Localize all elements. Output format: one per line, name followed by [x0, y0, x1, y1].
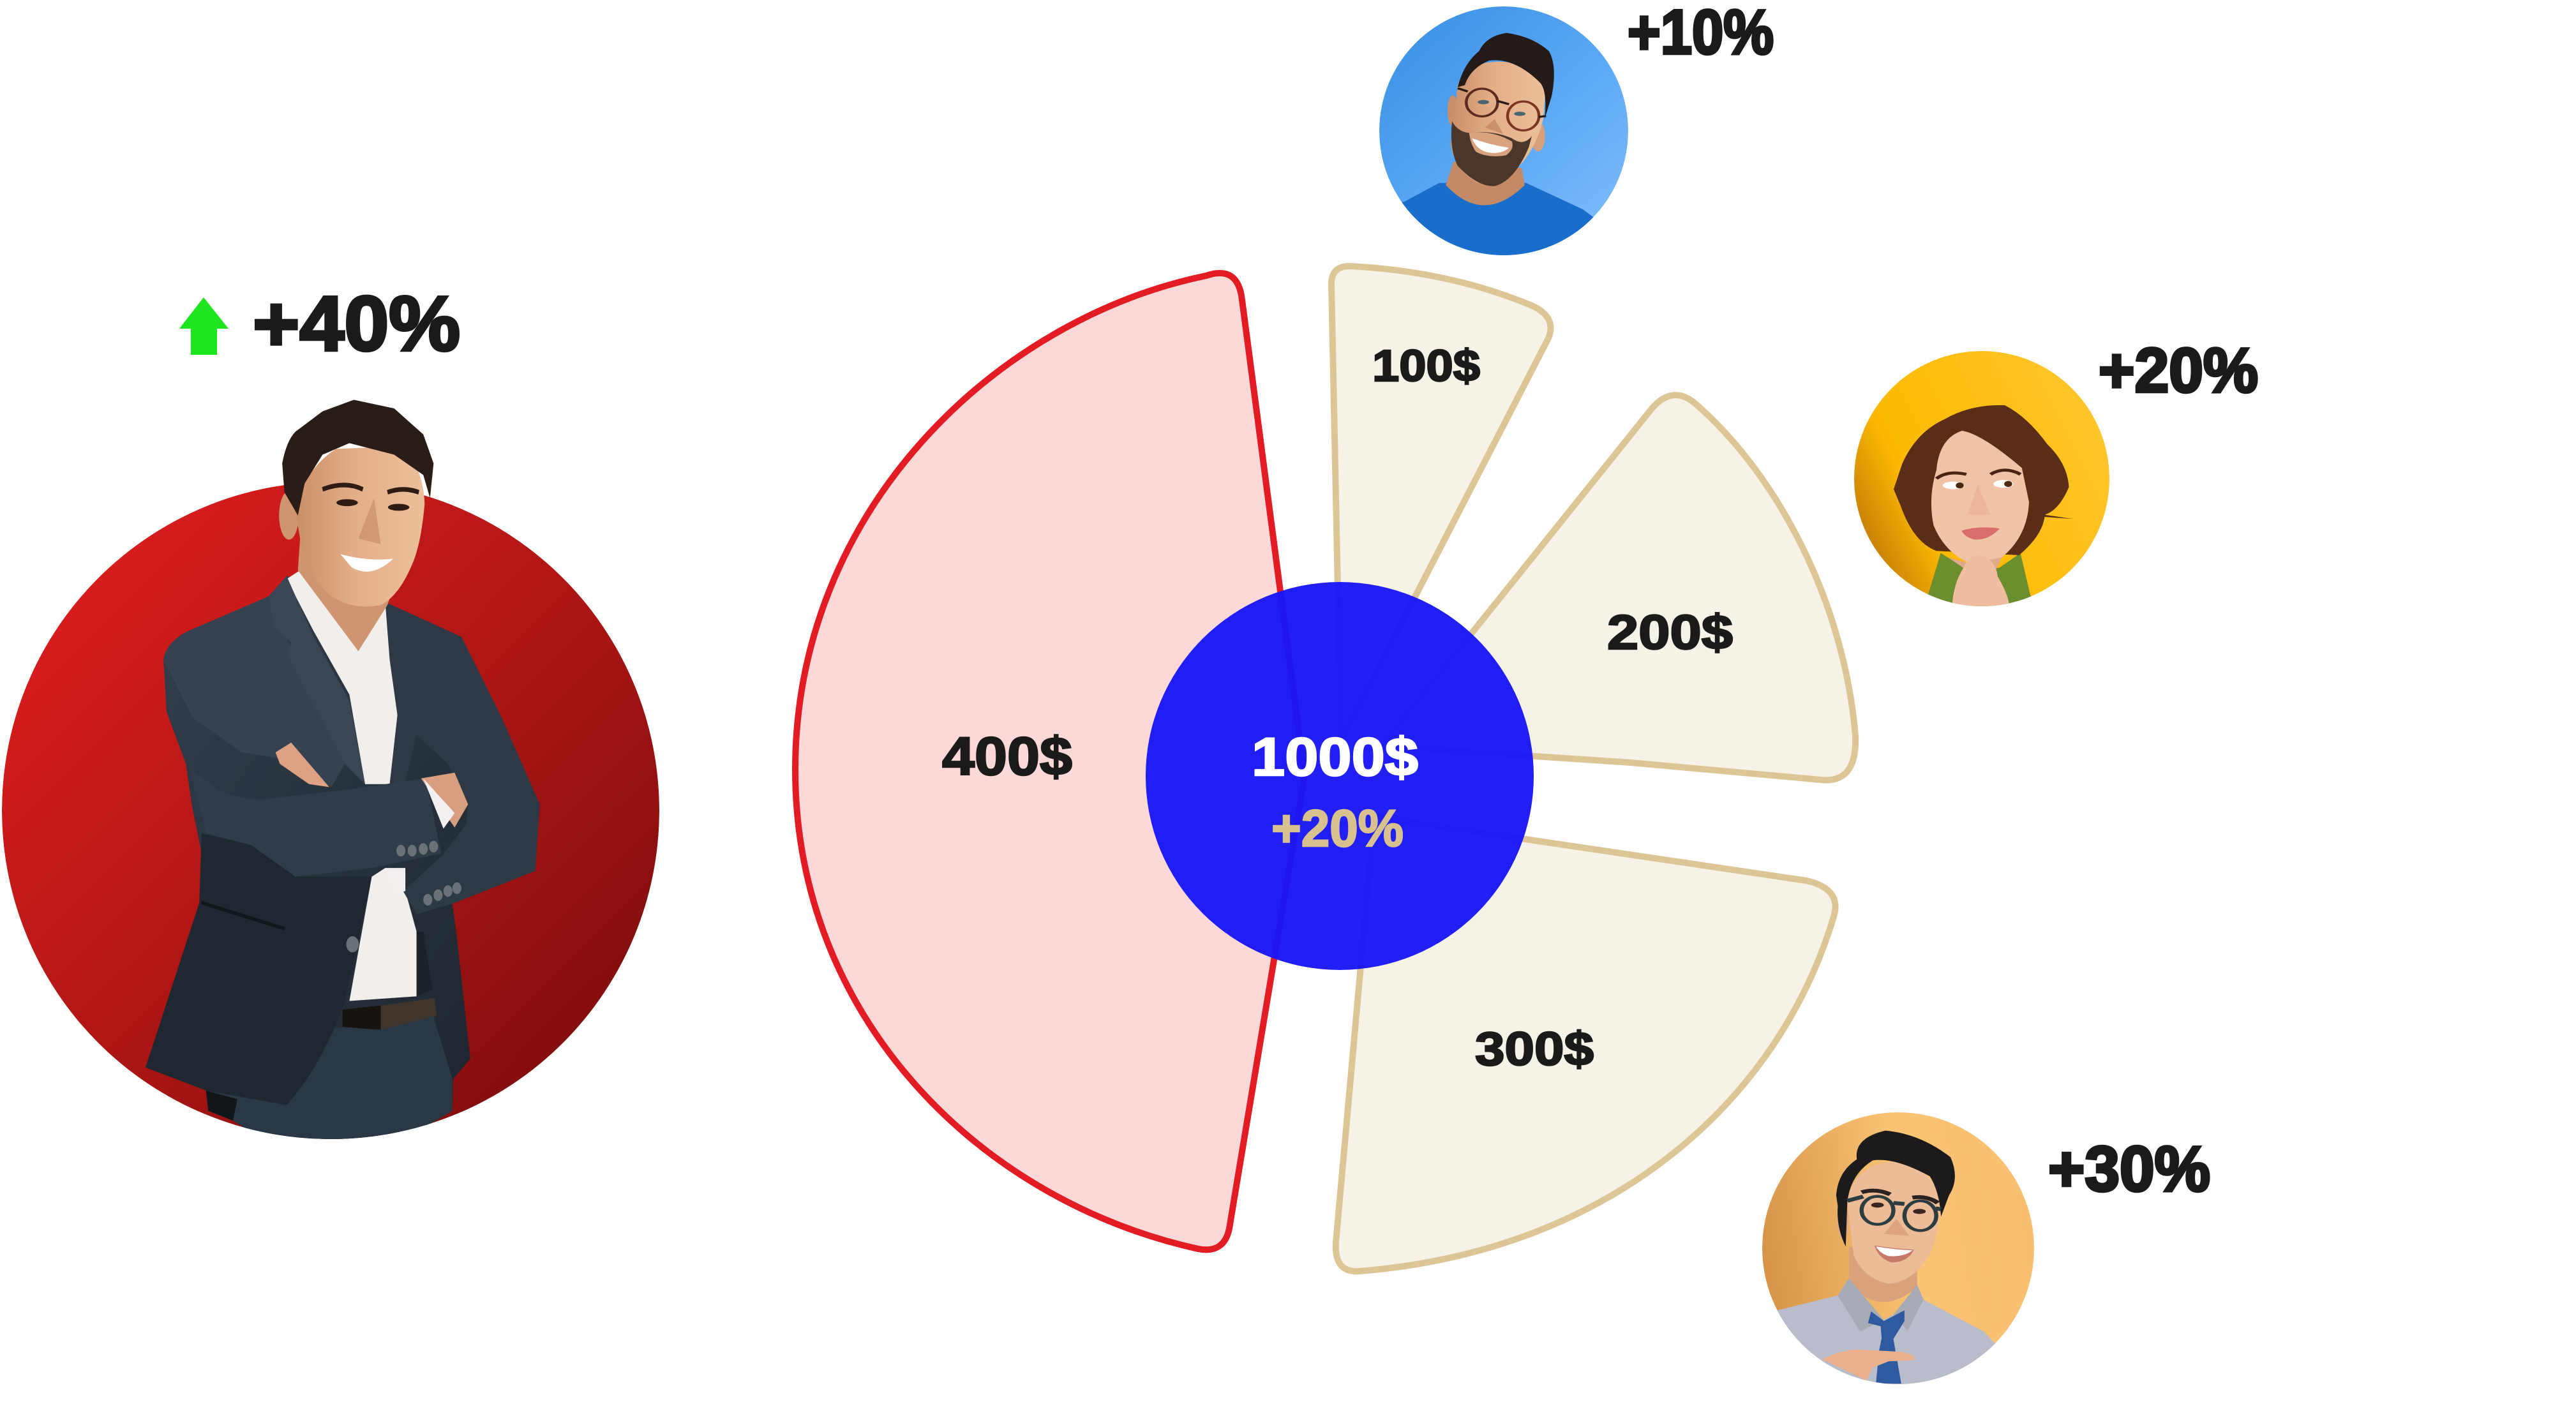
label: +40%: +40% [253, 280, 460, 367]
wedge: 200$ [1381, 395, 1855, 780]
chart: revenue pie wedges [795, 266, 1855, 1271]
label: 200$: 200$ [1607, 606, 1733, 660]
icon: green up arrow [179, 297, 228, 355]
wedge: 400$ [795, 273, 1305, 1250]
label: +30%: +30% [2048, 1133, 2210, 1205]
center circle [1146, 582, 1534, 970]
wedge: 300$ [1336, 817, 1836, 1271]
portrait: woman thinking on yellow [1854, 351, 2109, 608]
red circle background [2, 482, 659, 1139]
label: 400$: 400$ [942, 726, 1072, 786]
portrait: young man with tie on orange [1762, 1112, 2048, 1387]
label: center +20%: +20% [1271, 800, 1404, 858]
label: +20%: +20% [2099, 335, 2258, 405]
label: total 1000$: 1000$ [1252, 727, 1418, 787]
figure: man in suit [146, 399, 540, 1142]
portrait: man with glasses on blue [1372, 6, 1629, 255]
wedge: 100$ [1331, 266, 1551, 740]
label: 300$: 300$ [1475, 1022, 1594, 1075]
label: 100$: 100$ [1372, 341, 1480, 391]
portrait: businessman on red circle [2, 399, 659, 1142]
